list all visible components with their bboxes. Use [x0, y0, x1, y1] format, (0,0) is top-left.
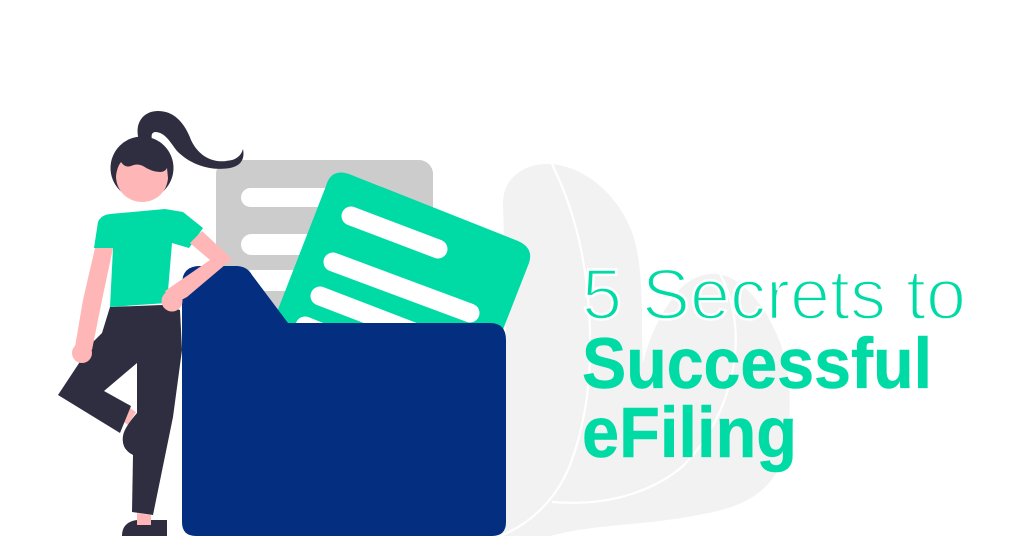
back arm — [75, 248, 113, 350]
front hand — [162, 290, 182, 312]
headline line 3: eFiling — [582, 394, 797, 473]
ponytail — [138, 111, 243, 169]
face — [116, 162, 168, 202]
navy folder — [182, 266, 506, 536]
grey back document — [216, 160, 433, 340]
headline line 1: 5 Secrets to — [582, 256, 966, 335]
hair — [110, 136, 174, 200]
trousers — [58, 305, 182, 515]
raised leg ankle — [124, 408, 136, 425]
background blob — [500, 164, 790, 536]
shoe — [122, 520, 167, 536]
standing ankle — [137, 513, 151, 526]
headline — [582, 256, 966, 473]
headline line 2: Successful — [582, 325, 932, 404]
back hand — [72, 343, 92, 363]
shirt — [94, 209, 203, 307]
woman leaning on folder — [58, 111, 243, 536]
green front document — [270, 172, 530, 364]
bent arm — [165, 231, 232, 305]
